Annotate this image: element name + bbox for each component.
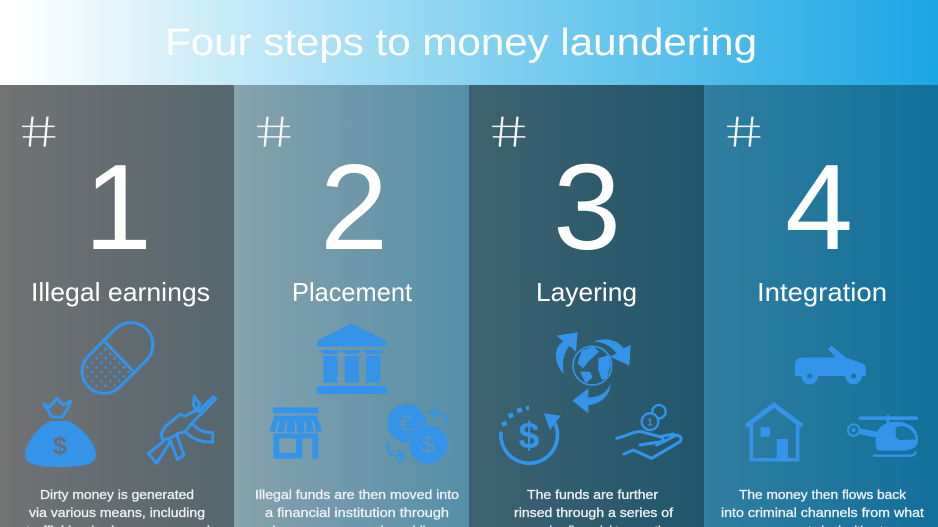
- icon: bank: [317, 323, 387, 394]
- icon: house: [746, 405, 802, 460]
- hash mark: #: [15, 106, 63, 157]
- coin value: 1: [647, 417, 653, 428]
- heading: Layering: [536, 277, 637, 307]
- step number: 3: [553, 139, 621, 275]
- icon: convertible car: [795, 346, 866, 384]
- panel: step 2 placement: [234, 85, 469, 527]
- panel: step 3 layering: [469, 85, 704, 527]
- description: Dirty money is generated: [40, 487, 194, 502]
- icon: hand with coins: [617, 405, 681, 458]
- step number: 1: [84, 139, 152, 275]
- header banner: [0, 0, 938, 85]
- icon: rifle: [148, 397, 216, 463]
- icon: shop: [270, 407, 322, 459]
- description: Illegal funds are then moved into: [255, 487, 459, 502]
- description: [514, 487, 680, 527]
- icon: pill: [73, 313, 162, 403]
- icon: money bag: [25, 398, 96, 467]
- hash mark: #: [720, 106, 768, 157]
- description: The funds are further: [527, 487, 659, 502]
- icon: globe with arrows: [556, 332, 631, 413]
- dollar sign: $: [519, 414, 540, 456]
- step number: 4: [785, 139, 853, 275]
- heading: Integration: [757, 277, 887, 307]
- dollar sign: $: [53, 432, 67, 460]
- heading: Placement: [292, 277, 413, 307]
- heading: Illegal earnings: [31, 277, 210, 307]
- panel: step 4 integration: [704, 85, 938, 527]
- icon: currency exchange: [387, 404, 448, 464]
- description: rinsed through a series of: [514, 505, 673, 520]
- description: [26, 487, 210, 527]
- panel: step 1 illegal earnings: [0, 85, 234, 527]
- hash mark: #: [250, 106, 298, 157]
- description: a financial institution through: [265, 505, 449, 520]
- description: [255, 487, 459, 527]
- euro sign: €: [400, 411, 412, 436]
- description: [721, 487, 924, 527]
- hash mark: #: [485, 106, 533, 157]
- description: via various means, including: [29, 505, 205, 520]
- title: Four steps to money laundering: [165, 22, 757, 64]
- step number: 2: [320, 139, 388, 275]
- icon: helicopter: [848, 415, 918, 456]
- description: The money then flows back: [739, 487, 907, 502]
- icon: dollar cycle: [501, 406, 561, 463]
- description: into criminal channels from what: [721, 505, 924, 520]
- dollar sign: $: [422, 432, 435, 458]
